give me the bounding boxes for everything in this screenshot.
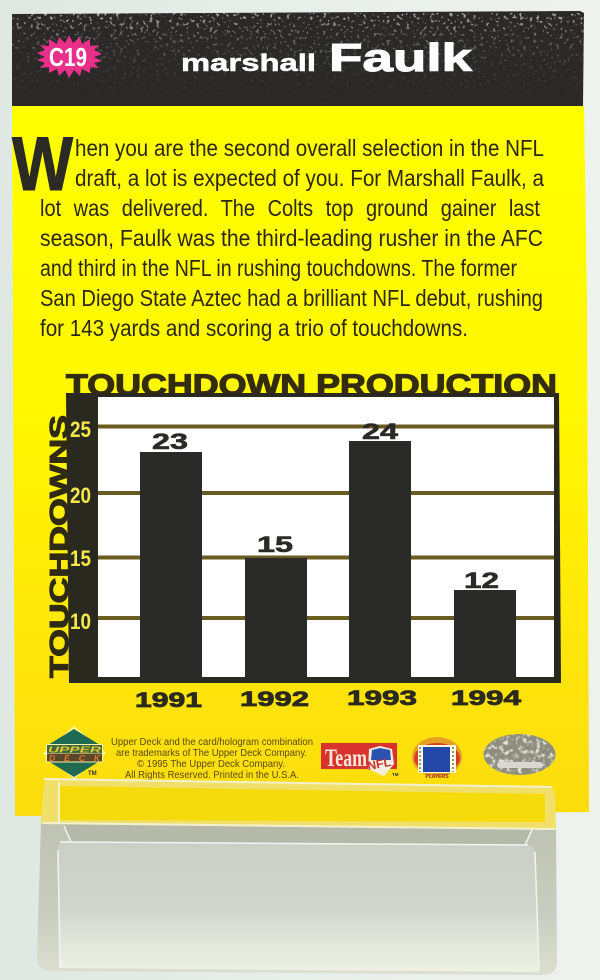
icon: Team NFL logo: Team — [325, 745, 367, 772]
bar 1993 — [349, 419, 411, 680]
card number: C19 — [49, 42, 87, 72]
text block: biography: San Diego State Aztec had a brilliant NFL debut, rushing — [40, 285, 543, 311]
icon: NFL Players logo — [412, 737, 462, 780]
icon: hologram football — [484, 734, 556, 775]
y axis ticks: 20 — [70, 483, 91, 508]
chart title: TOUCHDOWN PRODUCTION — [66, 369, 557, 402]
grid lines — [98, 424, 554, 620]
bar 1994 — [454, 568, 516, 680]
holder top lip over card — [41, 778, 556, 830]
chart plot area — [98, 397, 554, 677]
bar 1992: 15 — [257, 532, 293, 557]
text block: legal: are trademarks of The Upper Deck Company. — [116, 747, 307, 759]
panel: card — [12, 11, 589, 816]
text block: legal: © 1995 The Upper Deck Company. — [137, 758, 285, 770]
holder inner highlight — [58, 826, 539, 970]
x axis years: 1992 — [240, 687, 309, 711]
text block: legal: All Rights Reserved. Printed in the U.S.A. — [125, 769, 299, 781]
bar 1991 — [140, 429, 202, 680]
text block: legal — [111, 736, 313, 781]
icon: Upper Deck logo: UPPER — [48, 744, 103, 754]
text block: legal: Upper Deck and the card/hologram combination — [111, 736, 313, 748]
icon: Upper Deck logo: TM — [88, 771, 97, 777]
holder lower body — [37, 822, 557, 975]
icon: NFL Players logo: PLAYERS — [425, 774, 449, 780]
text block: biography: draft, a lot is expected of you. For Marshall Faulk, a — [75, 165, 544, 191]
y axis ticks: 15 — [70, 546, 91, 571]
x axis years: 1994 — [451, 686, 521, 710]
player last name: Faulk — [329, 37, 472, 80]
text block: biography: lot was delivered. The Colts top ground gainer last — [40, 195, 541, 221]
bar 1991: 23 — [152, 429, 188, 454]
icon: Team NFL logo — [321, 743, 399, 777]
holder inner pane — [58, 842, 539, 972]
bar 1994: 12 — [464, 568, 499, 593]
y axis ticks: 25 — [70, 417, 91, 442]
y axis ticks — [70, 417, 91, 634]
player first name: marshall — [181, 50, 316, 77]
x axis years — [135, 686, 521, 712]
text block: biography: hen you are the second overall selection in the NFL — [75, 135, 544, 161]
bar 1992 — [245, 532, 307, 680]
icon: Team NFL logo: NFL — [366, 755, 392, 773]
x axis years: 1993 — [347, 686, 417, 710]
chart frame — [66, 393, 561, 683]
holder dark band — [62, 824, 532, 845]
drop cap: W — [12, 122, 73, 207]
icon: Upper Deck logo — [43, 726, 106, 779]
bar chart: touchdown production — [66, 393, 561, 683]
panel: acrylic card holder — [37, 778, 557, 975]
y axis title: TOUCHDOWNS — [46, 415, 74, 678]
icon: card number starburst — [37, 35, 102, 78]
panel: black header — [12, 11, 584, 106]
bar 1993: 24 — [362, 419, 399, 444]
text block: biography: season, Faulk was the third-leading rusher in the AFC — [40, 225, 543, 251]
y axis ticks: 10 — [70, 609, 91, 634]
text block: biography — [12, 122, 544, 341]
x axis years: 1991 — [135, 688, 202, 712]
icon: Team NFL logo: TM — [392, 772, 399, 777]
text block: biography: and third in the NFL in rushing touchdowns. The former — [40, 255, 517, 281]
text block: biography: for 143 yards and scoring a trio of touchdowns. — [40, 315, 468, 341]
icon: Upper Deck logo: DECK — [49, 753, 101, 763]
panel: yellow card body — [12, 106, 589, 816]
